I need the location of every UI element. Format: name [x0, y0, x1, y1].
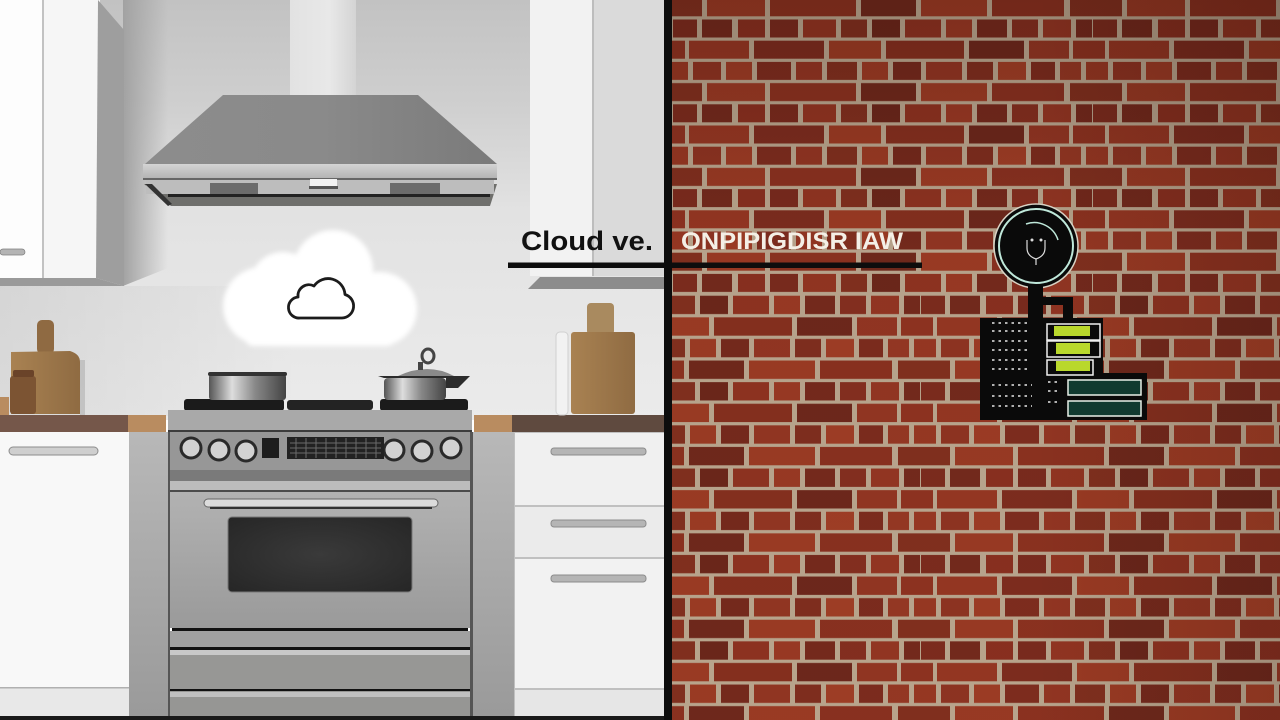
range hood	[143, 0, 497, 206]
center divider	[664, 0, 672, 720]
upper right cabinet	[528, 0, 665, 289]
range body	[168, 410, 473, 716]
icon: server rack	[980, 318, 1147, 420]
bottom edge line	[0, 716, 664, 720]
heading rule	[508, 262, 922, 268]
icon: dial circle	[994, 204, 1078, 288]
display and grille	[262, 437, 384, 459]
side panels of range	[129, 432, 514, 716]
dark teal drive bays	[1068, 380, 1141, 416]
panel: brick wall (on-premises side)	[668, 0, 1280, 720]
counter top left and right	[0, 415, 665, 432]
pots and burners	[184, 349, 470, 411]
title: left part: Cloud ve.	[521, 226, 653, 256]
oven window	[228, 517, 412, 592]
cloud shape	[223, 230, 417, 346]
icon: on-premises server with lock dial	[980, 204, 1147, 420]
title: right part: ONPIPIGDISR IAW	[681, 228, 903, 255]
lower right drawers	[514, 432, 665, 716]
lower left cabinet	[0, 432, 129, 716]
icon: connector bracket	[1028, 286, 1073, 319]
lime status slots	[1047, 324, 1100, 375]
control knobs	[181, 438, 461, 461]
icon: cloud outline	[288, 279, 354, 318]
panel: kitchen (cloud side)	[0, 0, 668, 716]
cutting board left	[0, 320, 85, 415]
rack indicator dots	[992, 323, 1060, 406]
upper left cabinet	[0, 0, 124, 286]
cutting board and bottle right	[556, 303, 635, 415]
kitchen wall	[0, 0, 668, 420]
brick pattern	[668, 0, 1280, 720]
